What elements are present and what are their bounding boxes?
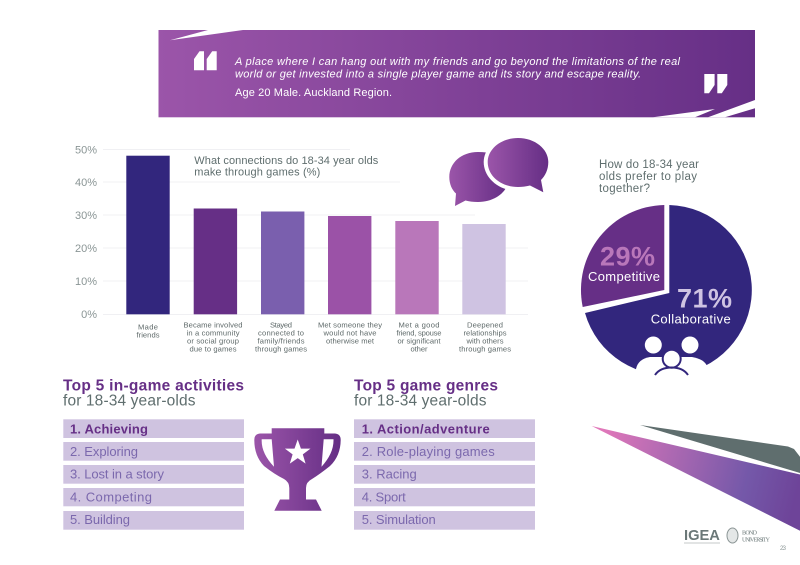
- y axis labels: 10%: [75, 276, 97, 288]
- logo: Bond University: [727, 528, 771, 544]
- x axis labels: would not have: [322, 328, 376, 338]
- trophy star: [285, 440, 310, 464]
- subheading: for 18-34 year-olds: [63, 393, 196, 410]
- subheading: for 18-34 year-olds: [354, 393, 487, 410]
- competitive label: Competitive: [588, 269, 660, 284]
- icon: three people: [636, 336, 707, 385]
- collaborative value: 71%: [677, 284, 732, 314]
- list text: 3. Lost in a story: [70, 467, 164, 482]
- icon: opening quote mark: [194, 51, 217, 70]
- y axis labels: [75, 144, 97, 321]
- top-left white streak: [170, 30, 243, 40]
- panel: top 5 in-game activities: [63, 378, 244, 530]
- x axis labels: with others: [466, 336, 504, 346]
- list text: 5. Simulation: [362, 512, 436, 527]
- list text: [70, 421, 164, 527]
- pie title: together?: [599, 183, 650, 195]
- y axis labels: 20%: [75, 243, 97, 255]
- quote text: [234, 56, 681, 80]
- chart title: [194, 155, 379, 178]
- list text: 4. Competing: [70, 489, 152, 504]
- quote text: world or get invested into a single player game and its story and escape reality.: [235, 68, 641, 80]
- y axis labels: 50%: [75, 144, 97, 156]
- bottom-right white streaks: [653, 100, 755, 117]
- quote text: A place where I can hang out with my friends and go beyond the limitations of the real: [234, 56, 681, 68]
- list text: 1. Action/adventure: [362, 421, 490, 436]
- x axis labels: Became involved: [184, 320, 242, 330]
- list text: 4. Sport: [362, 489, 406, 504]
- list text: 3. Racing: [362, 467, 417, 482]
- list text: 1. Achieving: [70, 421, 148, 436]
- pie title: olds prefer to play: [599, 171, 697, 183]
- x axis labels: Made: [138, 322, 158, 332]
- x axis labels: or significant: [398, 336, 441, 346]
- x axis labels: [136, 320, 511, 354]
- heading: Top 5 game genres: [354, 378, 498, 395]
- quote attribution: Age 20 Male. Auckland Region.: [235, 87, 392, 99]
- chart title: What connections do 18-34 year olds: [194, 155, 379, 167]
- bars: [126, 156, 506, 314]
- panel: quote banner: [158, 30, 755, 117]
- y axis labels: 40%: [75, 177, 97, 189]
- pie slice: collaborative: [585, 205, 752, 375]
- list rows: [354, 419, 535, 530]
- x axis labels: Deepened: [467, 320, 503, 330]
- heading: Top 5 in-game activities: [63, 378, 244, 395]
- decorative corner shapes: [592, 425, 800, 531]
- pie slice: competitive: [581, 205, 664, 307]
- x axis labels: through games: [459, 344, 511, 354]
- chart title: make through games (%): [194, 166, 320, 178]
- panel: play preference pie chart: [581, 159, 752, 385]
- logo: Bond University: UNIVERSITY: [742, 538, 771, 544]
- y axis labels: 30%: [75, 210, 97, 222]
- gap between bubbles: [484, 134, 552, 191]
- x axis labels: other: [410, 344, 428, 354]
- pie title: How do 18-34 year: [599, 159, 699, 171]
- logo: Bond University: BOND: [742, 530, 758, 536]
- y axis labels: 0%: [81, 309, 97, 321]
- list text: 5. Building: [70, 512, 130, 527]
- page number: 23: [780, 546, 787, 552]
- pie title: [599, 159, 699, 195]
- x axis labels: friends: [136, 330, 160, 340]
- list text: 2. Exploring: [70, 444, 138, 459]
- x axis labels: or social group: [187, 336, 239, 346]
- x axis labels: Met someone they: [318, 320, 382, 330]
- bar chart: connections made through games: [75, 144, 528, 354]
- x axis labels: due to games: [190, 344, 237, 354]
- logo: IGEA: IGEA: [684, 528, 720, 544]
- icon: closing quote mark: [704, 74, 727, 93]
- x axis labels: otherwise met: [326, 336, 375, 346]
- x axis labels: Met a good: [398, 320, 440, 330]
- list text: [362, 421, 495, 527]
- x axis labels: Stayed: [270, 320, 292, 330]
- x axis labels: in a community: [186, 328, 240, 338]
- x axis labels: family/friends: [258, 336, 305, 346]
- x axis labels: through games: [255, 344, 307, 354]
- icon: speech bubbles: [449, 134, 552, 206]
- x axis labels: connected to: [258, 328, 304, 338]
- icon: trophy: [254, 428, 341, 511]
- panel: top 5 game genres: [354, 378, 535, 530]
- list rows: [63, 419, 244, 530]
- collaborative label: Collaborative: [651, 312, 731, 326]
- x axis labels: relationships: [464, 328, 507, 338]
- banner background: [158, 30, 755, 117]
- x axis labels: friend, spouse: [396, 328, 442, 338]
- competitive value: 29%: [600, 242, 655, 272]
- list text: 2. Role-playing games: [362, 444, 495, 459]
